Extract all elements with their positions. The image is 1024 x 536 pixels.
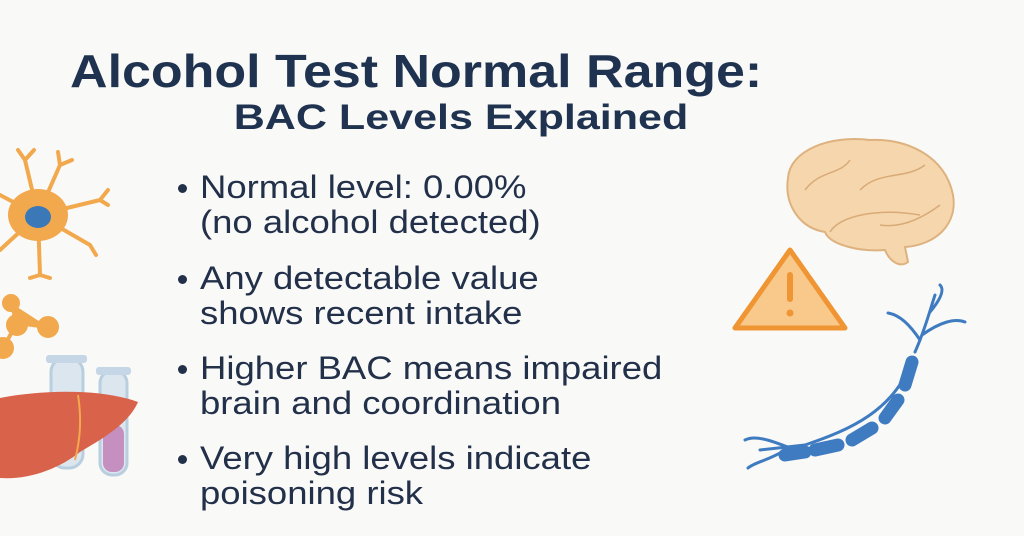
bullet 4: Very high levels indicate bbox=[200, 440, 591, 476]
title: Alcohol Test Normal Range: bbox=[70, 45, 762, 97]
bullet 2: shows recent intake bbox=[200, 295, 522, 331]
icon: brain bbox=[787, 139, 954, 264]
icon: test tubes bbox=[46, 355, 131, 475]
bullet 3: brain and coordination bbox=[200, 385, 561, 421]
bullet 2: Any detectable value bbox=[200, 260, 539, 296]
icon: axon bbox=[745, 285, 965, 468]
bullet 3 bbox=[178, 350, 662, 421]
icon: liver bbox=[0, 392, 138, 478]
bullet 4: poisoning risk bbox=[200, 475, 423, 511]
bullet list bbox=[178, 169, 662, 511]
bullet 1: (no alcohol detected) bbox=[200, 204, 541, 240]
bullet 1: Normal level: 0.00% bbox=[200, 169, 526, 205]
icon: molecule bbox=[0, 296, 57, 357]
bullet 2 bbox=[178, 260, 539, 331]
icon: warning triangle bbox=[735, 250, 845, 328]
subtitle: BAC Levels Explained bbox=[234, 98, 688, 137]
bullet 4 bbox=[178, 440, 591, 511]
bullet 1 bbox=[178, 169, 541, 240]
icon: neuron orange bbox=[0, 150, 108, 278]
bullet 3: Higher BAC means impaired bbox=[200, 350, 662, 386]
